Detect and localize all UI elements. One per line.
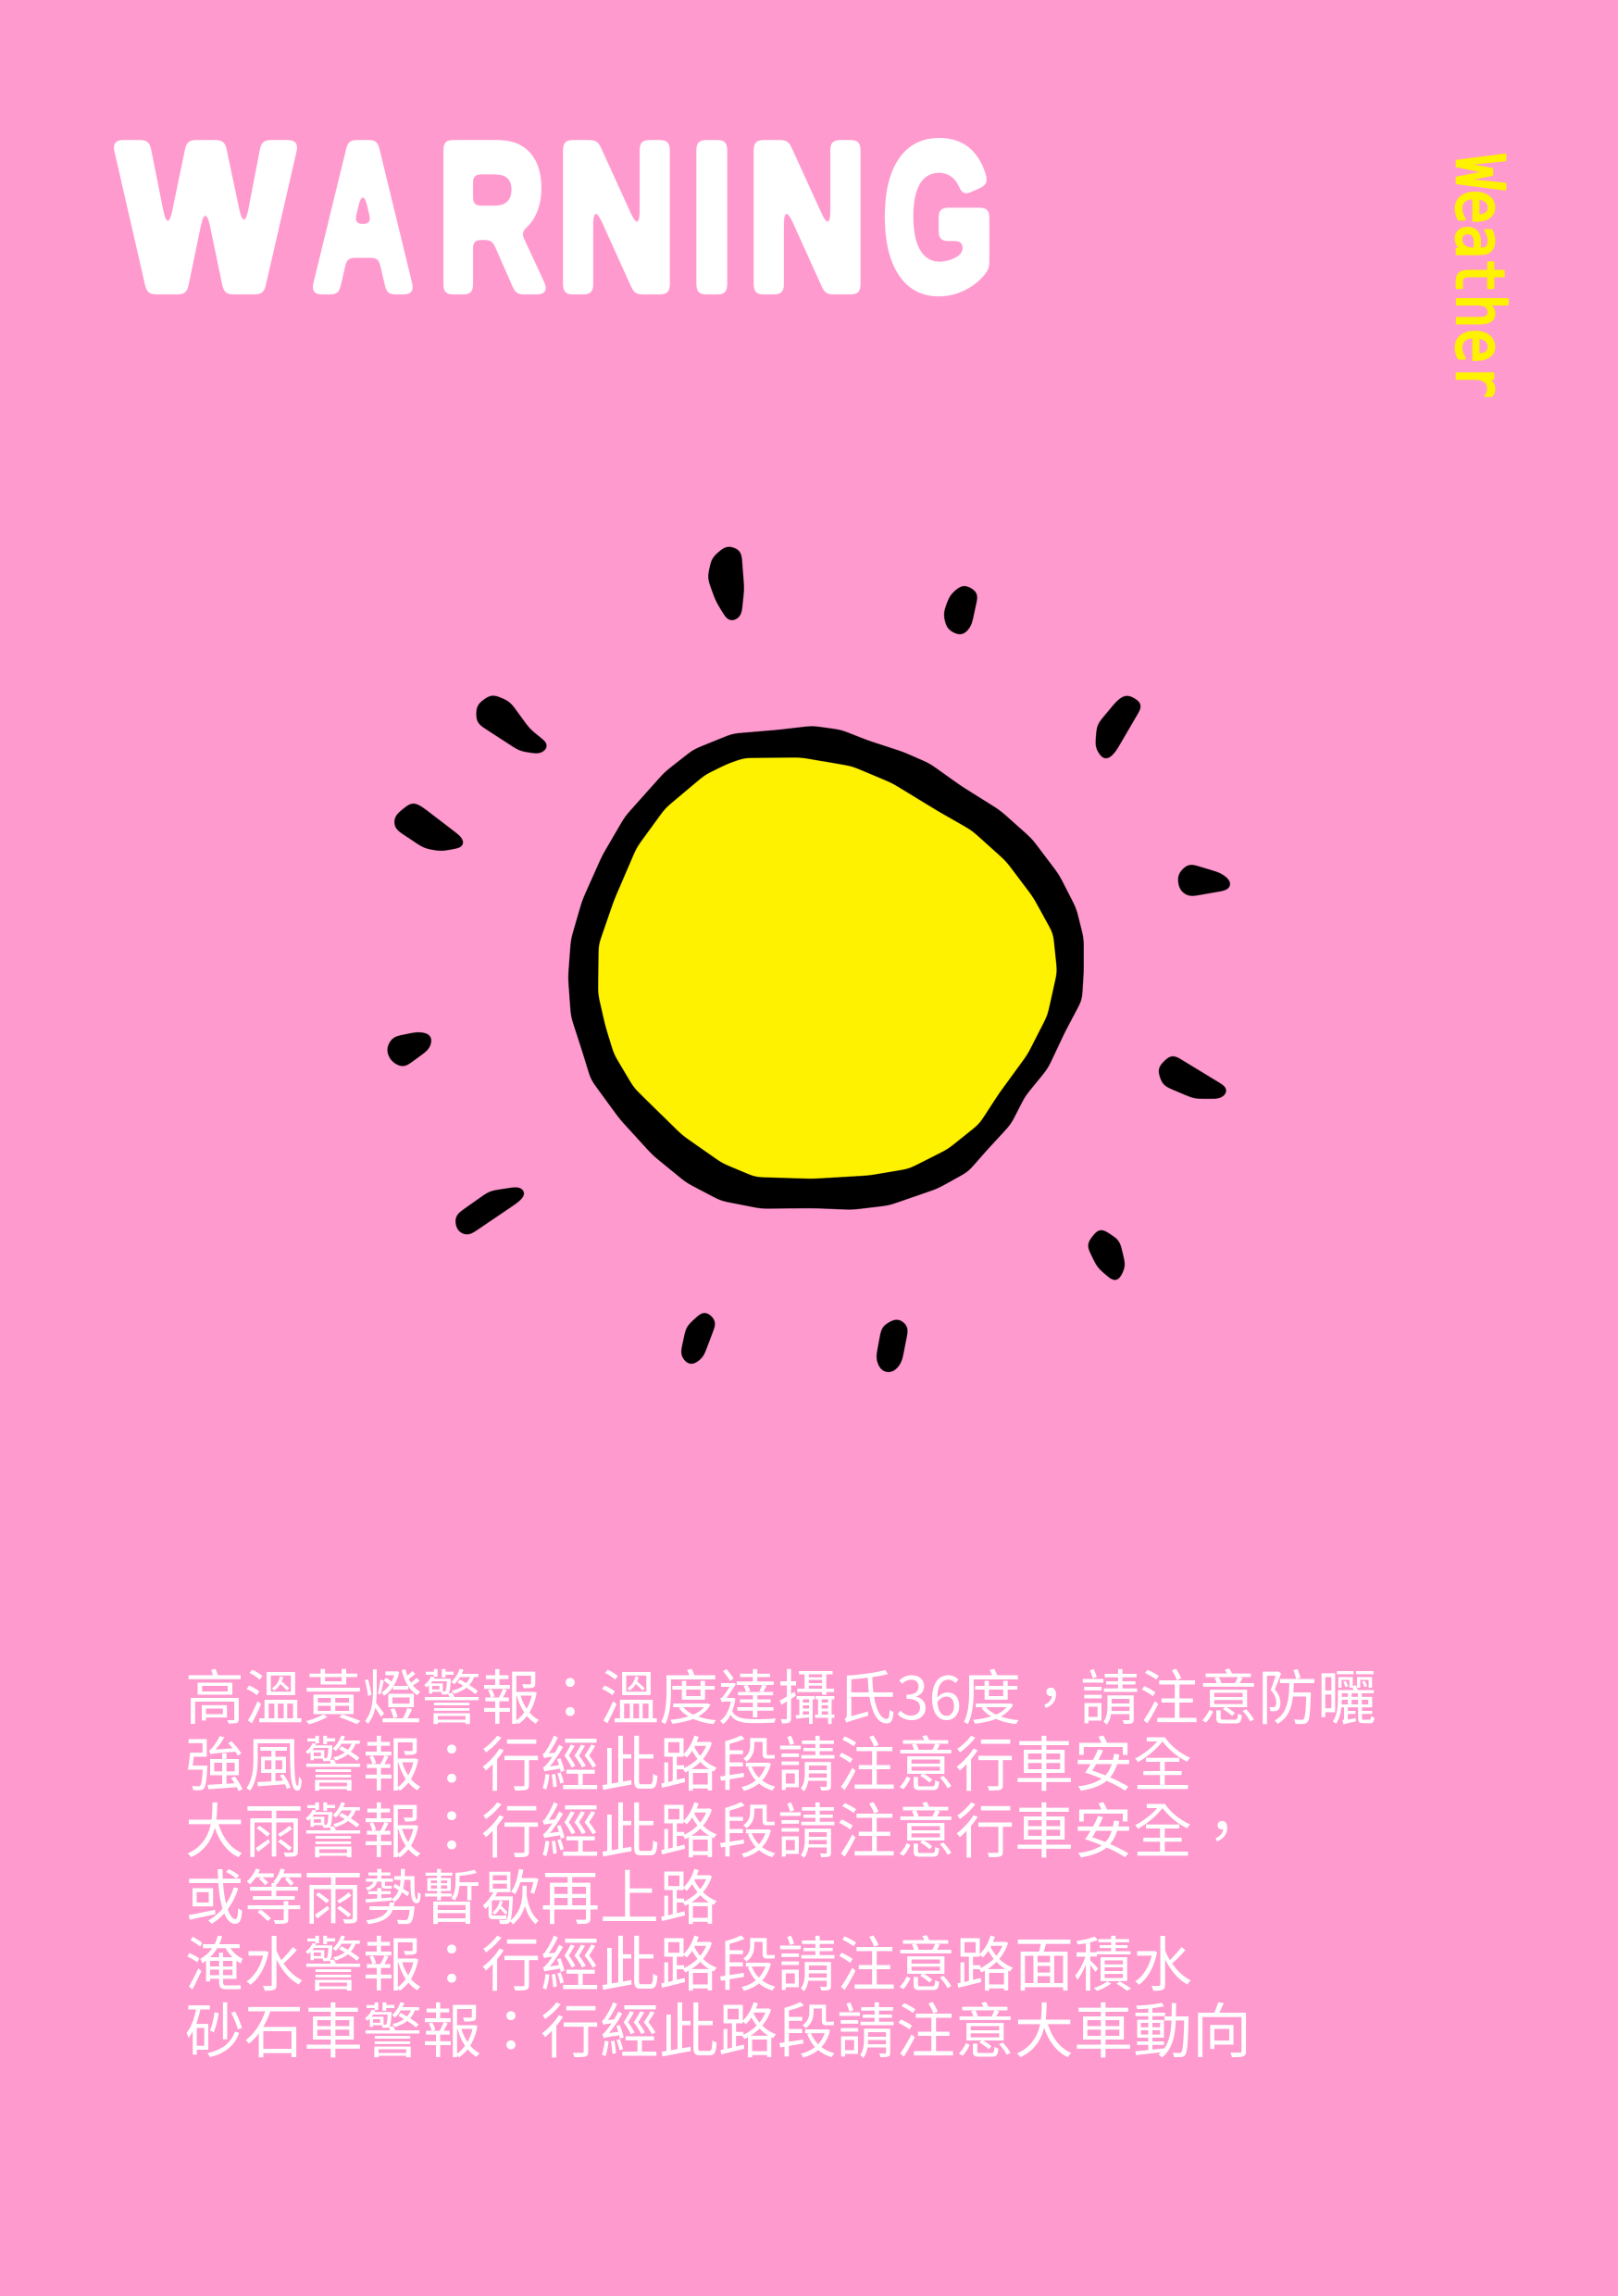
title: WARNING: R [438,101,545,333]
side label: Weather: Weather [1441,155,1518,398]
title: WARNING: I [691,101,733,334]
sun disc outline [570,728,1082,1208]
text block: warning notices: 高溫黃燈警報：溫度達攝氏36度，請注意防曬 [185,1652,1376,1737]
text block: warning notices: 大雨警報：行經此路段請注意行車安全， [185,1785,1251,1870]
text block: warning notices: 淹水警報：行經此路段請注意路面積水 [185,1918,1192,2003]
title: WARNING: N [747,102,867,334]
title: WARNING: N [556,102,677,334]
title: WARNING: G [883,100,994,333]
sun disc fill [599,758,1056,1178]
sun rays [389,548,1229,1370]
text block: warning notices: 或等雨勢暫歇再上路 [185,1852,718,1937]
text block: warning notices: 強風警報：行經此路段請注意行車安全 [185,1718,1192,1803]
title: WARNING [114,100,994,334]
text block: warning notices: 砂石車警報：行經此路段請注意大車動向 [185,1985,1251,2070]
illustration: sun [387,546,1231,1372]
text block: warning notices [185,1652,1376,2070]
title: WARNING: W [118,101,292,334]
title: WARNING: A [313,101,413,333]
